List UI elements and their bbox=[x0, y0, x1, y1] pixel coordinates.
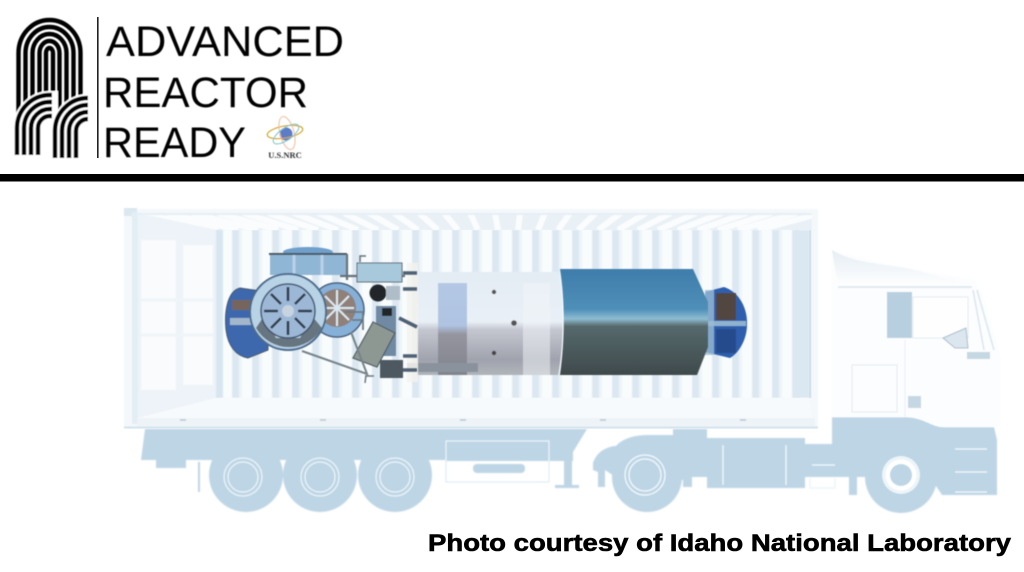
control panel bbox=[353, 322, 395, 367]
logo wordmark: READY bbox=[103, 119, 246, 167]
cargo container bbox=[124, 208, 822, 428]
corrugated back wall bbox=[215, 230, 810, 398]
rear turbine wheel bbox=[310, 283, 364, 337]
top fan box bbox=[283, 247, 333, 257]
inlet housing bbox=[226, 288, 268, 358]
tractor chassis, tank and wheels bbox=[593, 417, 997, 513]
support struts bbox=[302, 332, 367, 374]
icon: U.S. NRC seal bbox=[266, 115, 304, 160]
lower machinery bbox=[380, 360, 403, 378]
main turbine wheel bbox=[250, 274, 326, 350]
left side panel bbox=[137, 213, 223, 420]
reactor module bbox=[226, 247, 747, 383]
shield cylinder bbox=[560, 269, 708, 375]
logo wordmark: REACTOR bbox=[103, 69, 308, 117]
icon: front hub bbox=[882, 456, 920, 494]
photo credit: Photo courtesy of Idaho National Laboratory bbox=[428, 530, 1012, 557]
truck illustration bbox=[124, 208, 1012, 557]
upper accessory box bbox=[357, 263, 402, 282]
icon: U.S. NRC seal: U.S.NRC bbox=[268, 150, 302, 160]
logo wordmark: ADVANCED bbox=[106, 18, 344, 66]
header rule bbox=[0, 174, 1024, 182]
container frame and floor bbox=[124, 208, 818, 428]
trailer chassis bbox=[141, 429, 707, 512]
trailer wheel hubs bbox=[224, 441, 549, 496]
logo wordmark bbox=[103, 18, 344, 167]
connecting bolts bbox=[399, 273, 417, 370]
black motor bbox=[370, 284, 386, 302]
core cylinder bbox=[407, 263, 562, 382]
tractor details bbox=[625, 445, 987, 495]
tractor cab bbox=[832, 250, 1000, 427]
end cap bbox=[705, 287, 747, 358]
logo: concentric arches bbox=[17, 20, 92, 162]
logo divider bbox=[97, 17, 99, 158]
ceiling ribs bbox=[216, 216, 812, 230]
turbomachinery bbox=[226, 247, 417, 383]
